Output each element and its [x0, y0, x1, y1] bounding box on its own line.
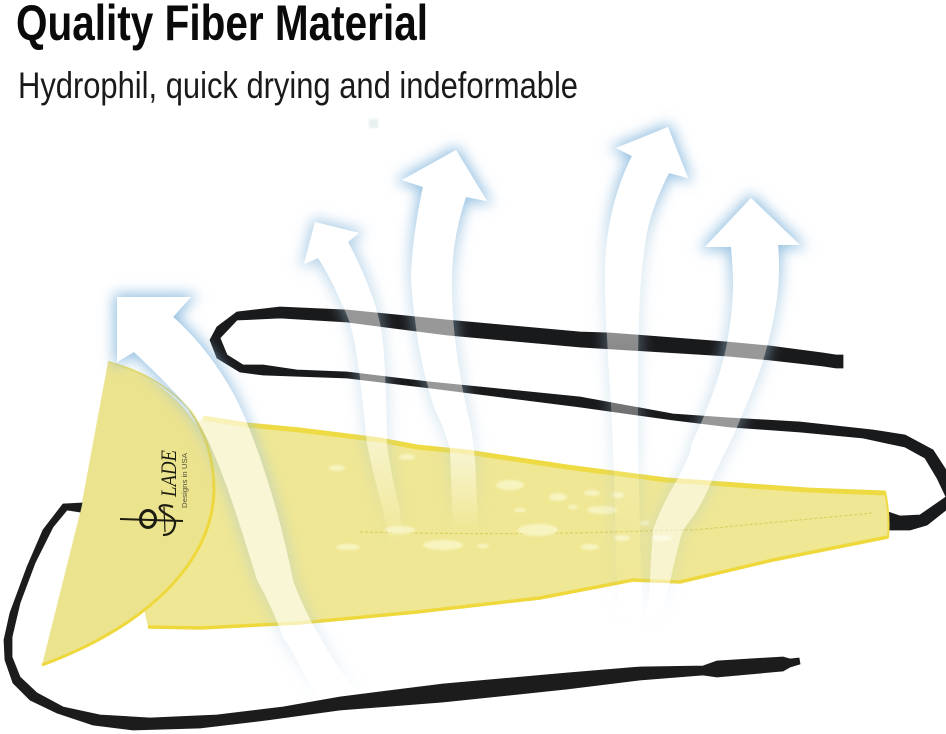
- water droplets: [329, 454, 672, 550]
- logo: [120, 450, 189, 535]
- seam: [360, 513, 873, 534]
- arrow: left: [117, 297, 365, 698]
- faint speck: [369, 119, 378, 128]
- arrow glows: [117, 127, 800, 698]
- arrow: fifth: [645, 198, 800, 620]
- bag body: [120, 418, 888, 628]
- upper strap: [210, 307, 946, 530]
- arrows: [117, 119, 800, 698]
- subtitle: Hydrophil, quick drying and indeformable: [18, 65, 578, 106]
- lower strap: [4, 503, 800, 730]
- bag flap: [42, 362, 214, 665]
- arrow: third: [402, 150, 487, 530]
- arrow: fourth: [605, 127, 688, 620]
- arrow: second: [304, 222, 402, 545]
- cloth bag: [42, 362, 889, 665]
- brand name: LADE: [156, 450, 181, 498]
- icon: treble clef: [120, 505, 183, 535]
- brand tagline: Designs in USA: [182, 453, 189, 508]
